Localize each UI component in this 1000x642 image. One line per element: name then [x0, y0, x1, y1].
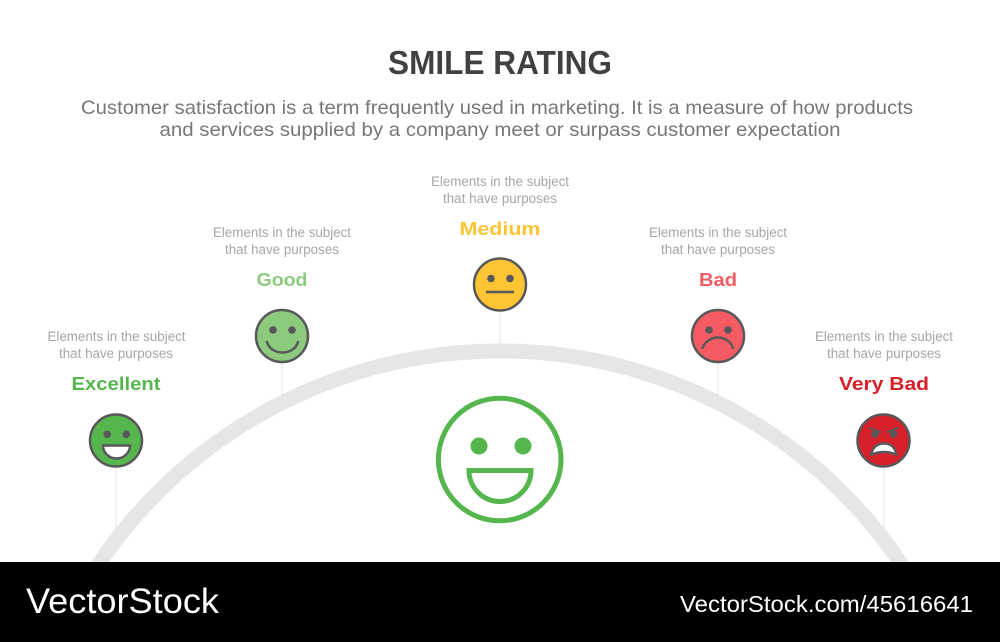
Good description: Elements in the subject [213, 225, 351, 240]
semicircular arc [97, 351, 903, 566]
Good connector line [281, 363, 283, 396]
Excellent description [48, 329, 186, 361]
subtitle text block: and services supplied by a company meet or surpass customer expectation [160, 119, 840, 141]
subtitle text block [81, 97, 913, 141]
Very Bad description: Elements in the subject [815, 329, 953, 344]
Medium description: that have purposes [443, 191, 557, 206]
Good heading: Good [256, 269, 308, 290]
item: Good [213, 225, 351, 396]
Excellent description: Elements in the subject [48, 329, 186, 344]
icon: good face [256, 310, 308, 362]
Very Bad connector line [883, 467, 885, 530]
Very Bad description [815, 329, 953, 361]
Bad description [649, 225, 787, 257]
item: Medium [431, 174, 569, 345]
Medium description: Elements in the subject [431, 174, 569, 189]
Medium heading: Medium [460, 218, 540, 239]
item: Bad [649, 225, 787, 396]
Good description [213, 225, 351, 257]
Medium description [431, 174, 569, 206]
Excellent connector line [115, 467, 117, 530]
Bad connector line [717, 363, 719, 396]
subtitle text block: Customer satisfaction is a term frequently used in marketing. It is a measure of how products [81, 97, 913, 119]
center large smile icon [438, 398, 561, 521]
Bad description: that have purposes [661, 242, 775, 257]
Very Bad description: that have purposes [827, 346, 941, 361]
Excellent description: that have purposes [59, 346, 173, 361]
Very Bad heading: Very Bad [839, 373, 929, 394]
Bad heading: Bad [699, 269, 737, 290]
item: Excellent [48, 329, 186, 530]
icon: bad face [692, 310, 744, 362]
Bad description: Elements in the subject [649, 225, 787, 240]
footer logo: VectorStock [26, 581, 219, 621]
Excellent heading: Excellent [72, 373, 160, 394]
Good description: that have purposes [225, 242, 339, 257]
title: SMILE RATING [388, 44, 612, 81]
item: Very Bad [815, 329, 953, 530]
Medium connector line [499, 311, 501, 345]
footer url: VectorStock.com/45616641 [680, 591, 973, 617]
icon: excellent face [90, 414, 142, 466]
footer bar [0, 562, 1000, 642]
icon: medium face [474, 258, 526, 310]
icon: very bad face [858, 414, 910, 466]
